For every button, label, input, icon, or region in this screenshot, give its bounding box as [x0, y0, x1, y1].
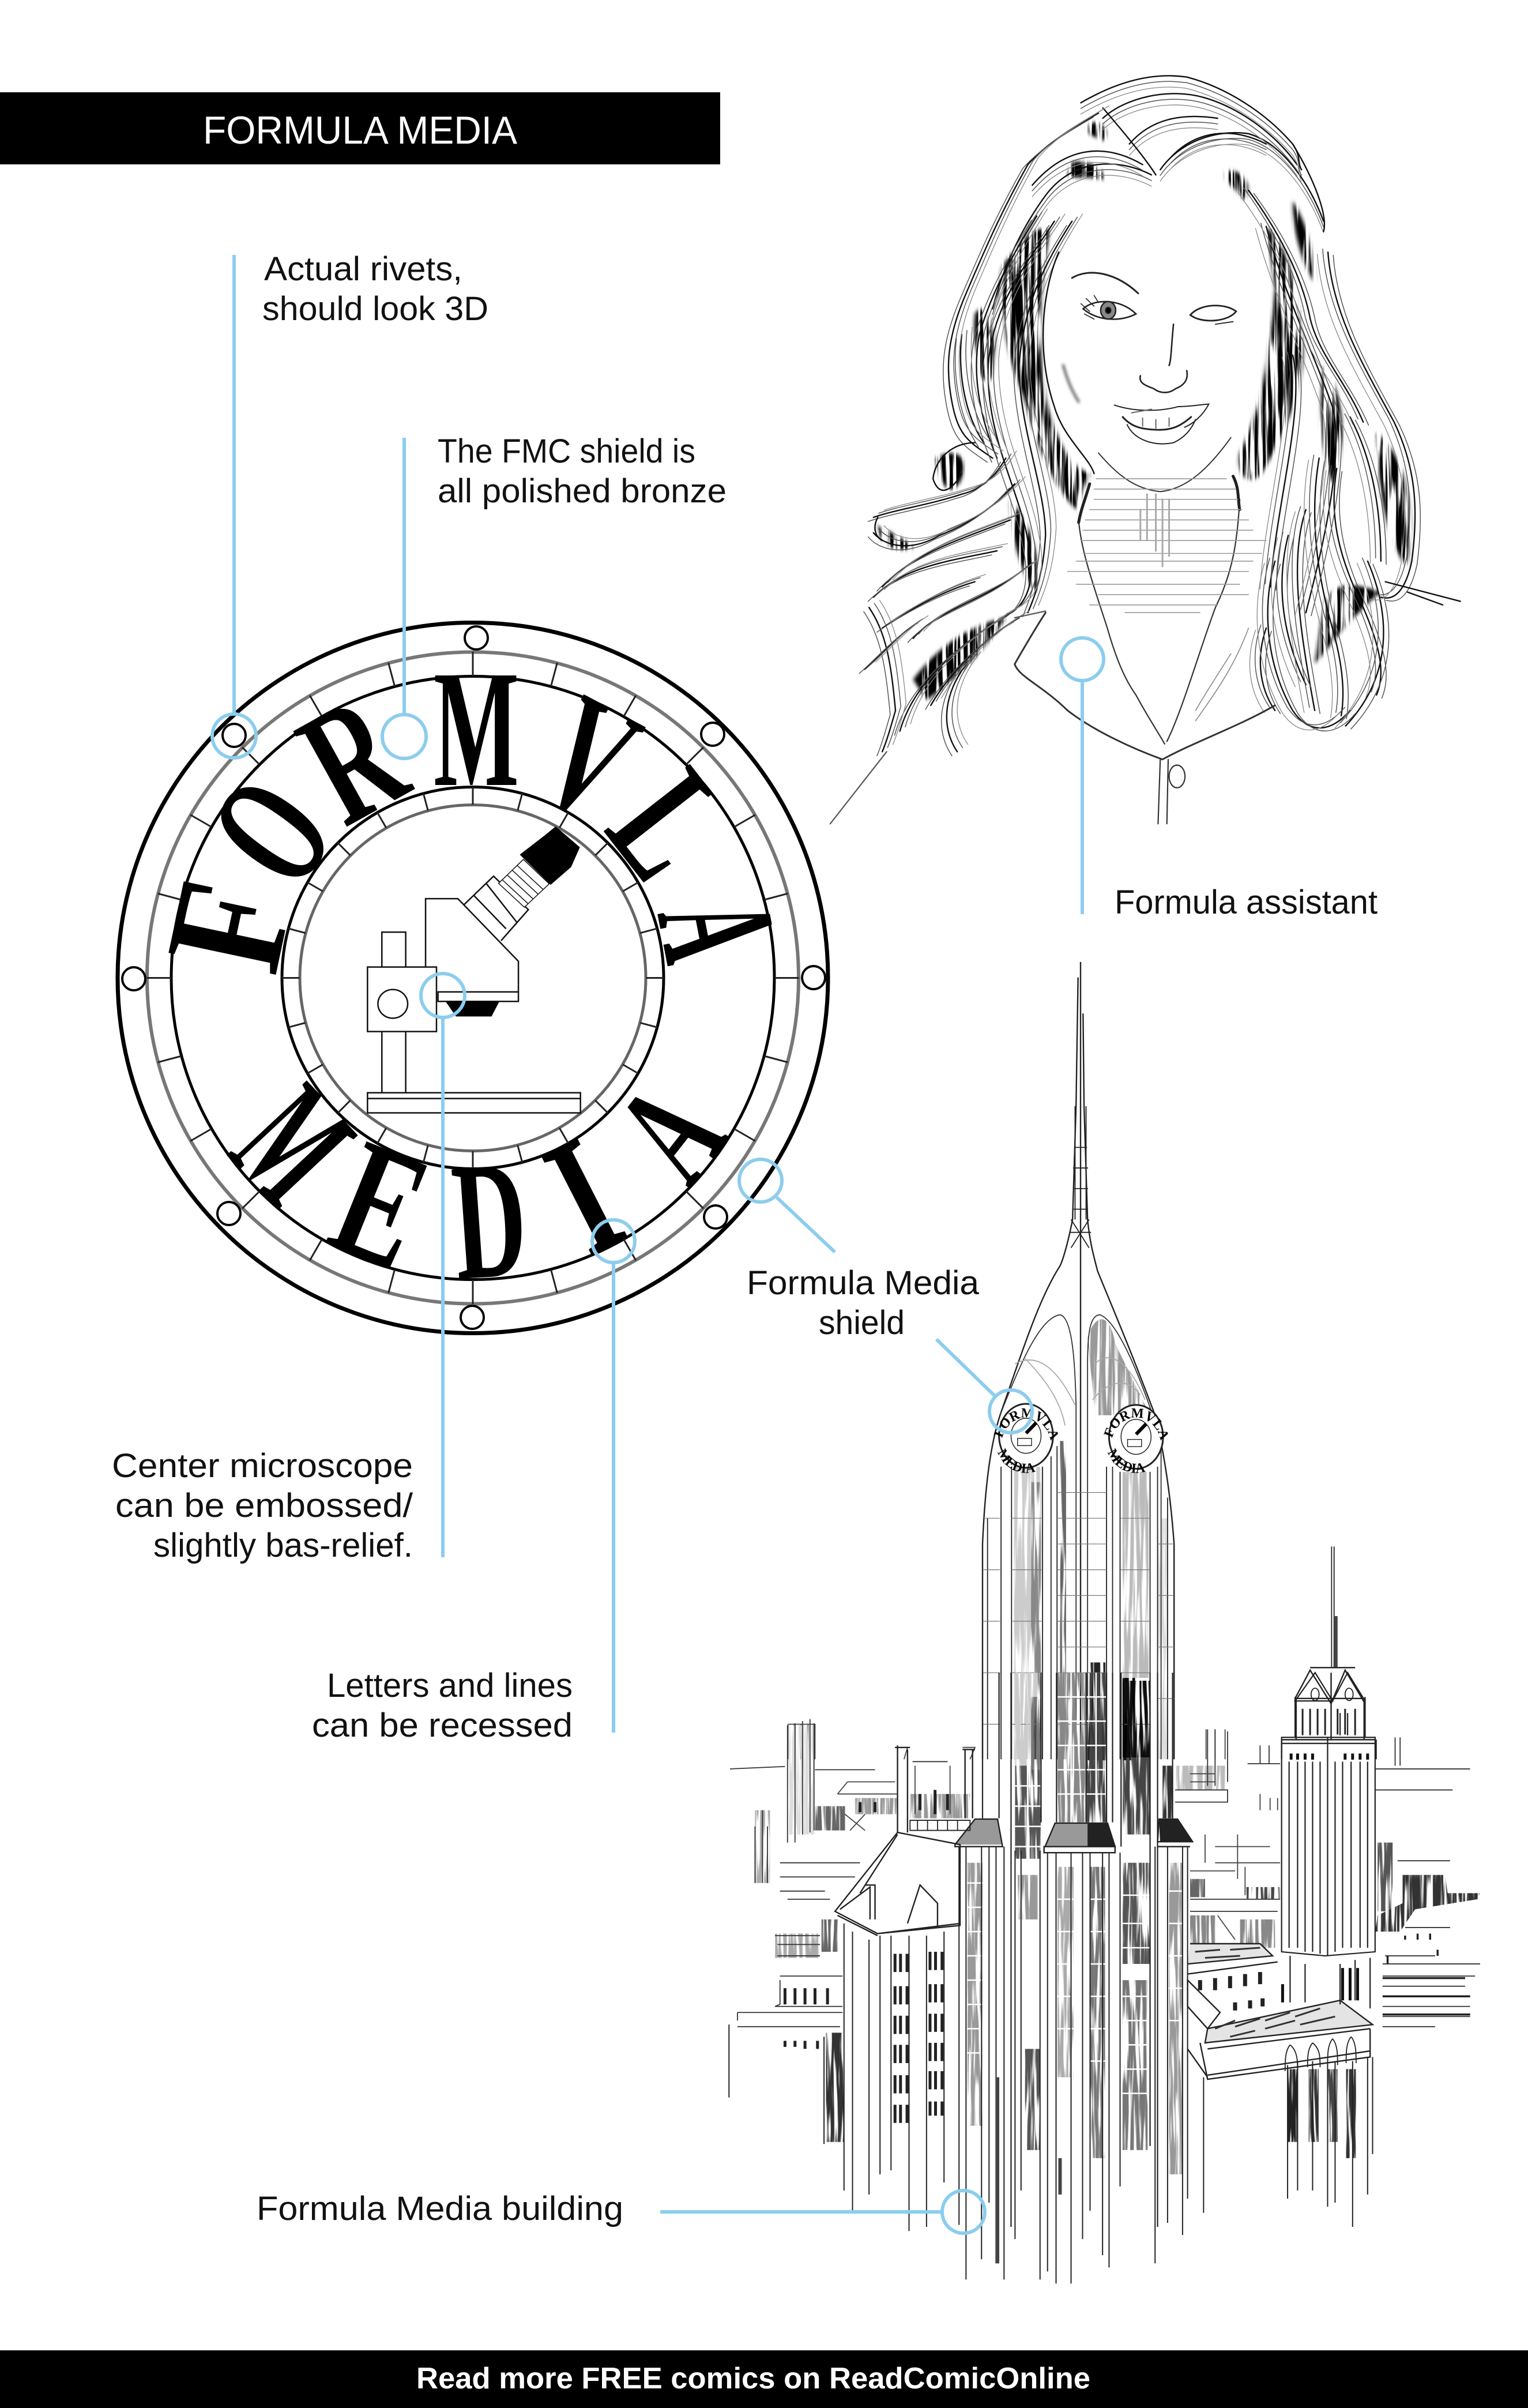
callout: FMC shield bronze	[382, 438, 426, 758]
arched letters: MEDIA: M	[199, 1053, 388, 1237]
left building	[835, 1745, 975, 1936]
footer bar: Read more FREE comics on ReadComicOnline	[416, 2362, 1090, 2395]
arched letters: FORMVLA: M	[434, 636, 519, 821]
arched letters: MEDIA: I	[521, 1103, 648, 1290]
collar and neckline	[830, 476, 1275, 824]
callout text: letters: can be recessed	[312, 1707, 573, 1744]
callout text: rivets	[262, 250, 488, 328]
callout text: bronze: The FMC shield is	[438, 433, 695, 470]
callout text: shield: Formula Media	[747, 1264, 980, 1302]
arched letters: FORMVLA: O	[175, 746, 368, 916]
right hair strands	[1238, 144, 1461, 731]
hair shading	[878, 122, 1410, 700]
callout text: microscope: Center microscope	[112, 1447, 413, 1485]
callout text: assistant: Formula assistant	[1115, 884, 1378, 921]
callout: Formula assistant	[1061, 638, 1104, 914]
tower verticals	[983, 1673, 1173, 2227]
callout text: microscope: can be embossed/	[115, 1487, 413, 1524]
lower right roofs	[1188, 1944, 1372, 2079]
tower shading	[1014, 1319, 1168, 1760]
drip lines	[959, 1847, 1188, 2283]
arched letters: FORMVLA: A	[622, 885, 814, 974]
top hair strands	[992, 76, 1323, 320]
mini shield left: FORMVLA	[993, 1408, 1058, 1441]
shield rings	[118, 623, 828, 1333]
rivets	[122, 626, 825, 1329]
callout: letters and lines	[592, 1220, 635, 1733]
arched letters: MEDIA: D	[447, 1125, 532, 1315]
neck hatching	[1068, 479, 1266, 613]
callout text: shield: shield	[819, 1304, 905, 1342]
callout text: building: Formula Media building	[257, 2190, 623, 2227]
callout text: bronze	[438, 433, 727, 510]
tower spire and upper body	[788, 962, 1377, 1760]
right city skyline	[1175, 1729, 1480, 2027]
footer bar	[0, 2350, 1528, 2408]
callout text: rivets: Actual rivets,	[264, 250, 462, 288]
right tower top	[1282, 1546, 1376, 1759]
heading bar: Formula Media	[0, 92, 720, 164]
callout text: bronze: all polished bronze	[438, 472, 727, 510]
roof tones	[955, 1819, 1372, 2043]
left city skyline	[730, 1719, 947, 2027]
microscope	[367, 828, 581, 1113]
logo: Formula Media shield	[118, 623, 828, 1333]
callout: rivets	[212, 255, 256, 758]
arched letters: MEDIA: A	[584, 1054, 756, 1209]
callout text: microscope: slightly bas-relief.	[153, 1527, 413, 1564]
heading bar: Formula Media: FORMULA MEDIA	[203, 108, 518, 152]
mini shield right: MEDIA	[1107, 1448, 1146, 1473]
arched letters: FORMVLA	[130, 636, 814, 985]
arched letters: FORMVLA: R	[273, 659, 433, 860]
right tall tower	[1282, 1737, 1375, 2008]
callout text: rivets: should look 3D	[262, 290, 488, 328]
mini shield left: MEDIA	[998, 1448, 1036, 1473]
window grid highlights	[968, 1673, 1182, 2094]
arched letters: FORMVLA: F	[130, 867, 328, 985]
mini shield left	[993, 1403, 1058, 1473]
illustration: Formula assistant pencil portrait	[830, 76, 1461, 824]
arched letters: FORMVLA: V	[514, 659, 665, 856]
pinnacle roofs	[955, 1819, 1192, 1853]
callout: Formula Media building	[660, 2191, 985, 2233]
left hair strands	[859, 106, 1109, 756]
callout text: shield	[747, 1264, 980, 1342]
arched letters: MEDIA	[199, 1053, 756, 1315]
illustration: Formula Media building	[728, 962, 1480, 2284]
mini shield right	[1104, 1404, 1168, 1473]
callout: shield on logo and building	[739, 1159, 1032, 1433]
callout text: letters: Letters and lines	[327, 1667, 573, 1704]
arched letters: FORMVLA: L	[573, 738, 765, 911]
face	[1063, 273, 1236, 491]
callout text: letters	[312, 1667, 573, 1744]
arched letters: MEDIA: E	[310, 1105, 451, 1305]
callout: center microscope	[421, 974, 465, 1557]
tower base and city	[729, 1673, 1480, 2283]
left building windows	[895, 1952, 942, 2123]
base shading	[755, 1673, 1480, 2174]
mini shield right: FORMVLA	[1104, 1408, 1168, 1441]
callout text: microscope	[112, 1447, 413, 1564]
